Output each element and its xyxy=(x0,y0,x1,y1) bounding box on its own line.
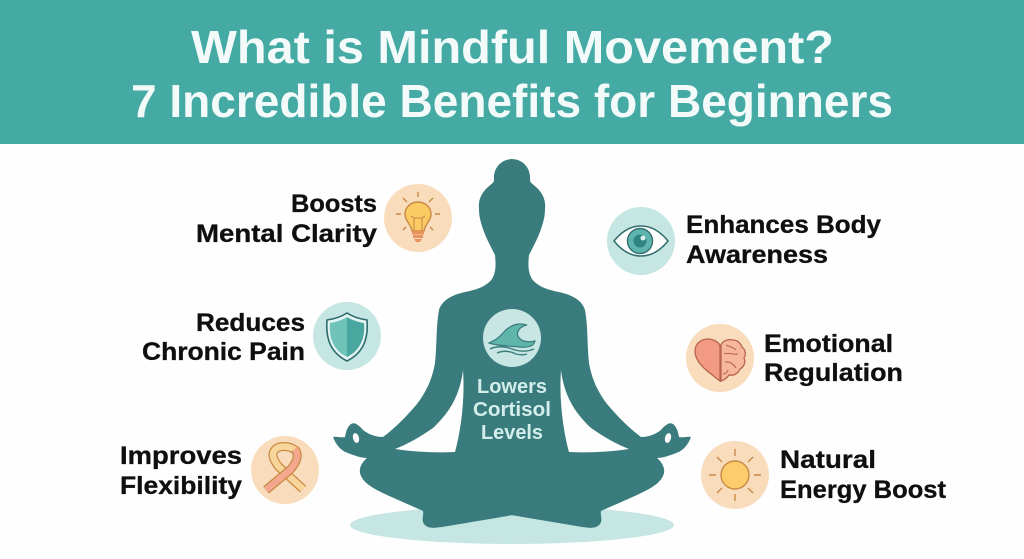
benefit: Reduces Chronic Pain xyxy=(142,302,381,370)
benefit: Enhances Body Awareness: Enhances Body xyxy=(686,211,881,239)
benefit: Natural Energy Boost xyxy=(701,441,947,509)
center label: Lowers Cortisol Levels xyxy=(473,375,551,444)
title: What is Mindful Movement? xyxy=(191,21,834,73)
benefit: Improves Flexibility: Improves xyxy=(120,442,242,470)
center label: Lowers Cortisol Levels: Levels xyxy=(481,421,543,444)
ground shadow xyxy=(350,506,674,544)
benefit: Emotional Regulation xyxy=(686,324,903,392)
meditating silhouette xyxy=(333,159,691,528)
header banner xyxy=(0,0,1024,144)
benefit: Improves Flexibility xyxy=(120,436,319,504)
title xyxy=(131,21,893,127)
benefit: Boosts Mental Clarity: Mental Clarity xyxy=(196,220,377,248)
icon: sun xyxy=(701,441,769,509)
icon: eye xyxy=(607,207,675,275)
benefit: Improves Flexibility: Flexibility xyxy=(120,472,242,500)
center label: Lowers Cortisol Levels: Lowers xyxy=(477,375,547,398)
benefit: Natural Energy Boost: Energy Boost xyxy=(780,476,947,504)
benefit: Enhances Body Awareness xyxy=(607,207,881,275)
benefit: Emotional Regulation: Emotional xyxy=(764,330,893,358)
benefit: Reduces Chronic Pain: Chronic Pain xyxy=(142,338,305,366)
benefit: Boosts Mental Clarity xyxy=(196,184,452,252)
benefit: Natural Energy Boost: Natural xyxy=(780,446,876,474)
title: 7 Incredible Benefits for Beginners xyxy=(131,75,893,127)
icon: shield xyxy=(313,302,381,370)
benefit: Reduces Chronic Pain: Reduces xyxy=(196,309,305,337)
icon: wave xyxy=(483,309,541,367)
benefit: Boosts Mental Clarity: Boosts xyxy=(291,190,377,218)
icon: light bulb xyxy=(384,184,452,252)
icon: ribbon xyxy=(251,436,319,504)
icon: heart and brain xyxy=(686,324,754,392)
benefit: Emotional Regulation: Regulation xyxy=(764,359,903,387)
center label: Lowers Cortisol Levels: Cortisol xyxy=(473,398,551,421)
benefit: Enhances Body Awareness: Awareness xyxy=(686,241,828,269)
